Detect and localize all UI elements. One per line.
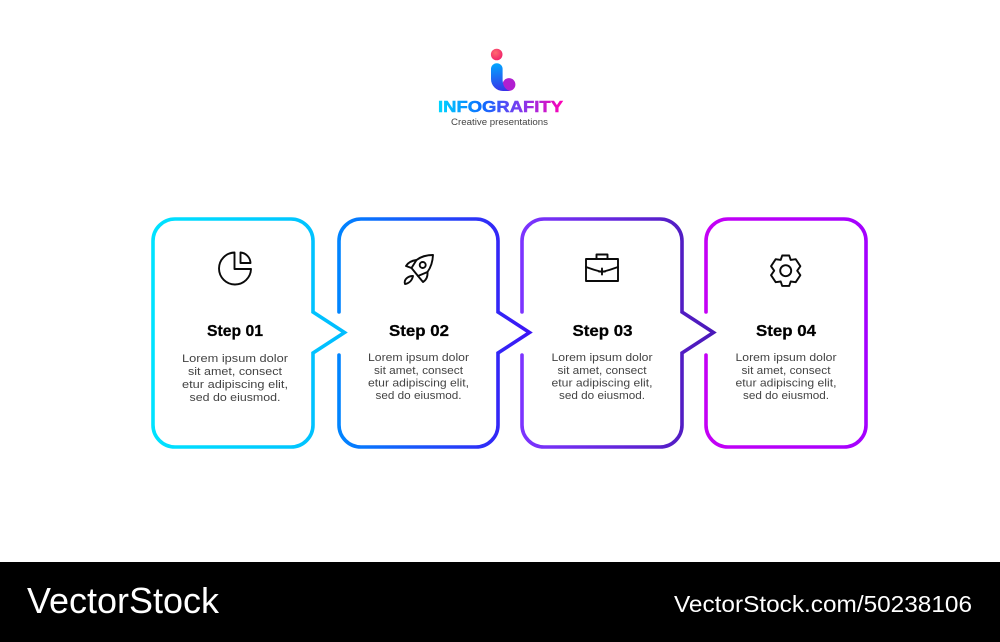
text block: step 02: sit amet, consect [374,365,463,377]
icon: rocket [405,255,433,284]
panel outline [706,219,866,447]
panel outline with arrow [522,219,714,447]
panel outline with arrow [153,219,344,447]
footer bar [0,562,1000,642]
logo: Infografity [438,49,563,127]
heading: step 02: Step 02 [389,323,449,340]
text block: step 02: sed do eiusmod. [376,390,462,402]
text block: step 04: etur adipiscing elit, [736,378,836,390]
heading: step 03: Step 03 [572,323,633,340]
logo tagline: Creative presentations [451,117,549,127]
text block: step 01: Lorem ipsum dolor [182,353,288,365]
text block: step 03: sit amet, consect [558,365,646,377]
text block: step 01: sit amet, consect [188,366,282,378]
text block: step 04: Lorem ipsum dolor [736,352,837,364]
panel: step 03 [522,219,714,447]
icon: gear [771,256,800,286]
panel outline with arrow [339,219,530,447]
text block: step 01 [182,353,288,404]
logo wordmark: INFOGRAFITY [438,99,563,116]
panel: step 01 [153,219,344,447]
footer brand: VectorStock [27,580,220,621]
panel: step 02 [339,219,530,447]
text block: step 03: Lorem ipsum dolor [552,352,653,364]
heading: step 04: Step 04 [756,323,816,340]
heading: step 01: Step 01 [207,323,263,340]
logo mark [491,49,515,91]
text block: step 03: sed do eiusmod. [559,390,645,402]
icon: briefcase [586,254,618,281]
icon: pie chart [219,252,251,284]
text block: step 02: Lorem ipsum dolor [368,352,469,364]
text block: step 02 [368,352,469,402]
text block: step 01: sed do eiusmod. [190,392,280,404]
text block: step 03 [552,352,653,402]
text block: step 01: etur adipiscing elit, [182,379,288,391]
text block: step 04 [736,352,837,402]
footer image id: VectorStock.com/50238106 [674,591,972,617]
text block: step 04: sit amet, consect [742,365,830,377]
panel: step 04 [706,219,866,447]
text block: step 03: etur adipiscing elit, [552,378,652,390]
text block: step 04: sed do eiusmod. [743,390,829,402]
text block: step 02: etur adipiscing elit, [368,378,469,390]
